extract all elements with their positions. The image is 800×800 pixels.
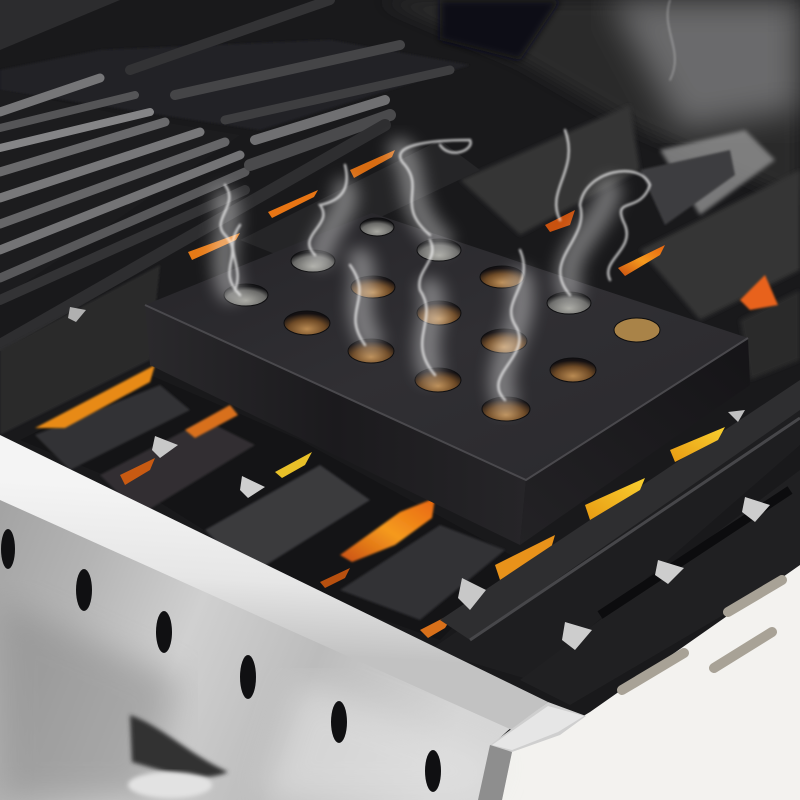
front steel lid [0,435,548,800]
grate clips [68,307,770,650]
box holes [224,218,660,421]
box front side [145,305,526,545]
box top [145,213,748,480]
smoker box [145,213,750,545]
smoke wisps [221,0,675,400]
vent slots [1,529,441,792]
rear firebox shading [380,0,800,380]
corner bracket [478,702,586,800]
mid-left burner bars with flames [0,140,778,435]
rear flame streaks [188,150,778,310]
steel rim highlight [0,435,548,730]
box right side [520,338,750,545]
upper-left cooking grate [0,0,470,345]
right grate rods [430,380,800,705]
right white side panel [495,565,800,800]
reflection on lid [128,715,228,798]
front burner bars [20,365,555,640]
